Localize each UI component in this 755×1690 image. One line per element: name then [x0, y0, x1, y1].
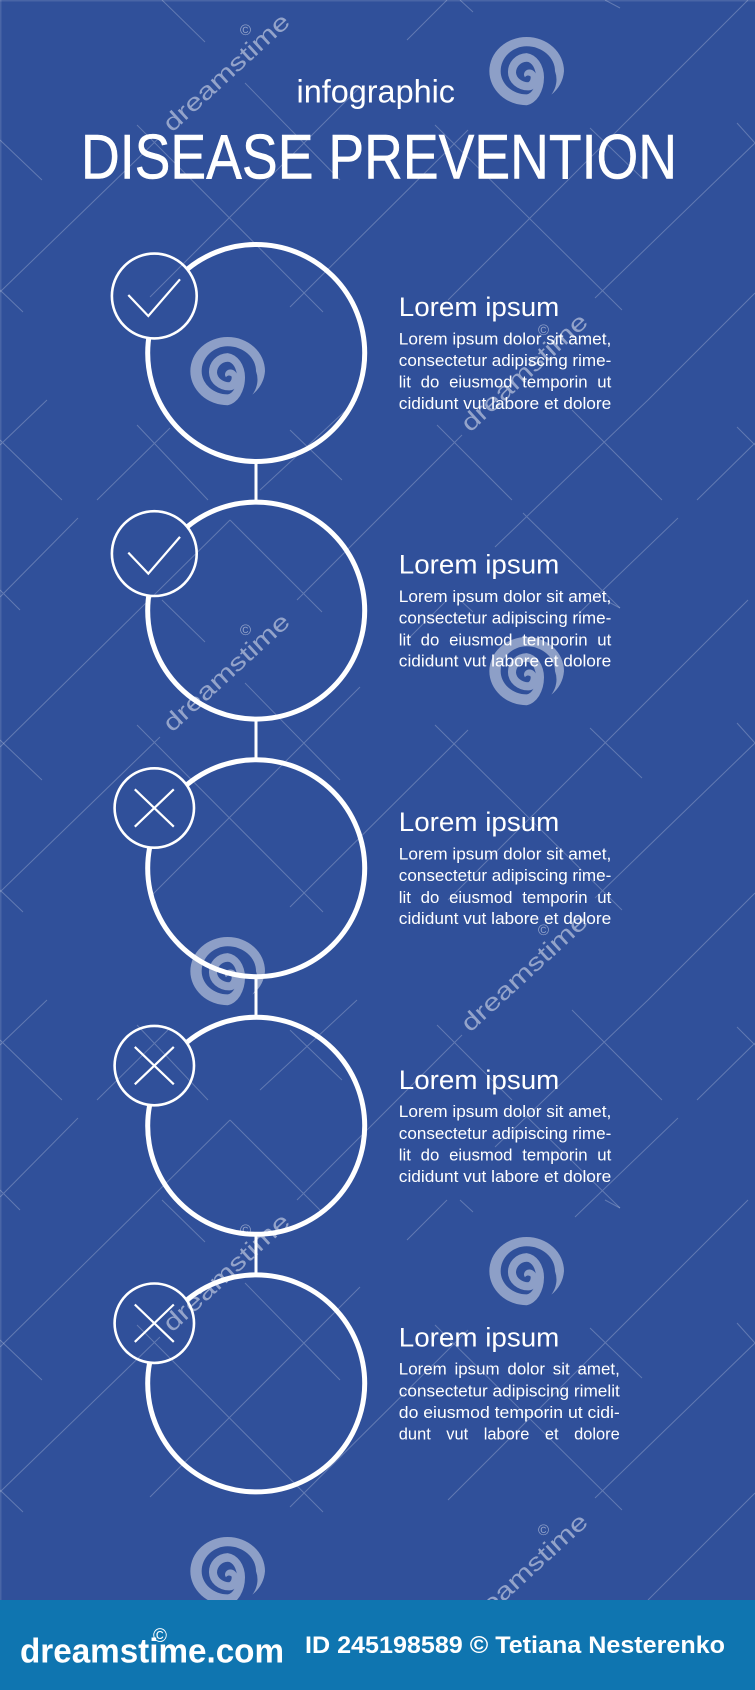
badge circle 4 — [115, 1026, 194, 1105]
step 2 text block: cididunt vut labore et dolore — [399, 653, 611, 671]
footer credit: ID 245198589 © Tetiana Nesterenko — [305, 1632, 725, 1659]
watermark text: dreamstime — [456, 1508, 593, 1637]
large circle 4 — [148, 1017, 365, 1234]
watermark text: © — [538, 922, 549, 939]
step 3 heading: Lorem ipsum — [399, 807, 559, 837]
badge circle 5 — [115, 1284, 194, 1363]
watermark spirals — [190, 37, 564, 1605]
step 5 text block — [399, 1361, 620, 1443]
step 3 text block — [399, 846, 612, 928]
step 1 text block: Lorem ipsum dolor sit amet, — [399, 330, 611, 348]
watermark text: © — [240, 1222, 251, 1239]
icon: cross 4 — [135, 1047, 174, 1084]
badge circle 1 — [112, 254, 197, 338]
watermark text — [158, 8, 593, 1637]
icon: cross 5 — [135, 1304, 174, 1342]
large circle 2 — [148, 502, 365, 719]
step 5 text block: Lorem ipsum dolor sit amet, — [399, 1361, 620, 1379]
step 2 text block: consectetur adipiscing rime- — [399, 610, 611, 628]
watermark text: dreamstime — [456, 908, 593, 1037]
large circle 1 — [148, 244, 365, 462]
watermark text: dreamstime — [158, 608, 295, 737]
icon: check mark 1 — [128, 279, 180, 316]
step 4 text block: Lorem ipsum dolor sit amet, — [399, 1103, 611, 1121]
step 1 text block — [399, 330, 612, 413]
large circle 5 — [148, 1275, 365, 1492]
step 2 — [112, 502, 612, 719]
step 4 text block: lit do eiusmod temporin ut — [399, 1146, 612, 1164]
watermark text: © — [240, 622, 251, 639]
step 1 text block: consectetur adipiscing rime- — [399, 352, 611, 370]
step 4 text block: consectetur adipiscing rime- — [399, 1125, 611, 1143]
footer logo mark: © — [153, 1626, 167, 1647]
step 5 text block: dunt vut labore et dolore — [399, 1425, 620, 1443]
step 5 text block: do eiusmod temporin ut cidi- — [399, 1404, 620, 1422]
step 3 text block: lit do eiusmod temporin ut — [399, 889, 612, 907]
icon: cross 3 — [135, 789, 174, 827]
step 3 text block: cididunt vut labore et dolore — [399, 910, 611, 928]
step 3 text block: Lorem ipsum dolor sit amet, — [399, 846, 611, 864]
step 1 — [112, 244, 612, 462]
step 1 text block: lit do eiusmod temporin ut — [399, 374, 612, 392]
watermark text: © — [538, 322, 549, 339]
watermark text: © — [240, 22, 251, 39]
badge circle 3 — [115, 768, 194, 848]
step 1 text block: cididunt vut labore et dolore — [399, 395, 611, 413]
watermark text: dreamstime — [456, 308, 593, 437]
step 5 text block: consectetur adipiscing rimelit — [399, 1382, 620, 1400]
heading: infographic: infographic — [296, 74, 455, 110]
step 3 text block: consectetur adipiscing rime- — [399, 867, 611, 885]
step 2 text block: lit do eiusmod temporin ut — [399, 631, 612, 649]
step 4 heading: Lorem ipsum — [399, 1065, 559, 1095]
watermark text: dreamstime — [158, 8, 295, 137]
step 4 — [115, 1017, 612, 1234]
watermark text: © — [538, 1522, 549, 1539]
step 2 text block — [399, 588, 612, 671]
step 5 — [115, 1275, 620, 1492]
watermark text: dreamstime — [158, 1208, 295, 1337]
step 3 — [115, 760, 612, 977]
badge circle 2 — [112, 511, 197, 596]
step 4 text block — [399, 1103, 612, 1186]
step 1 heading: Lorem ipsum — [399, 292, 559, 322]
large circle 3 — [148, 760, 365, 977]
footer bar — [0, 1600, 755, 1690]
icon: check mark 2 — [128, 537, 180, 574]
footer logo text: dreamstime.com — [20, 1633, 284, 1671]
step 2 text block: Lorem ipsum dolor sit amet, — [399, 588, 611, 606]
connector lines between circles — [254, 462, 258, 1275]
step 2 heading: Lorem ipsum — [399, 550, 559, 580]
step 4 text block: cididunt vut labore et dolore — [399, 1168, 611, 1186]
step 5 heading: Lorem ipsum — [399, 1322, 559, 1352]
